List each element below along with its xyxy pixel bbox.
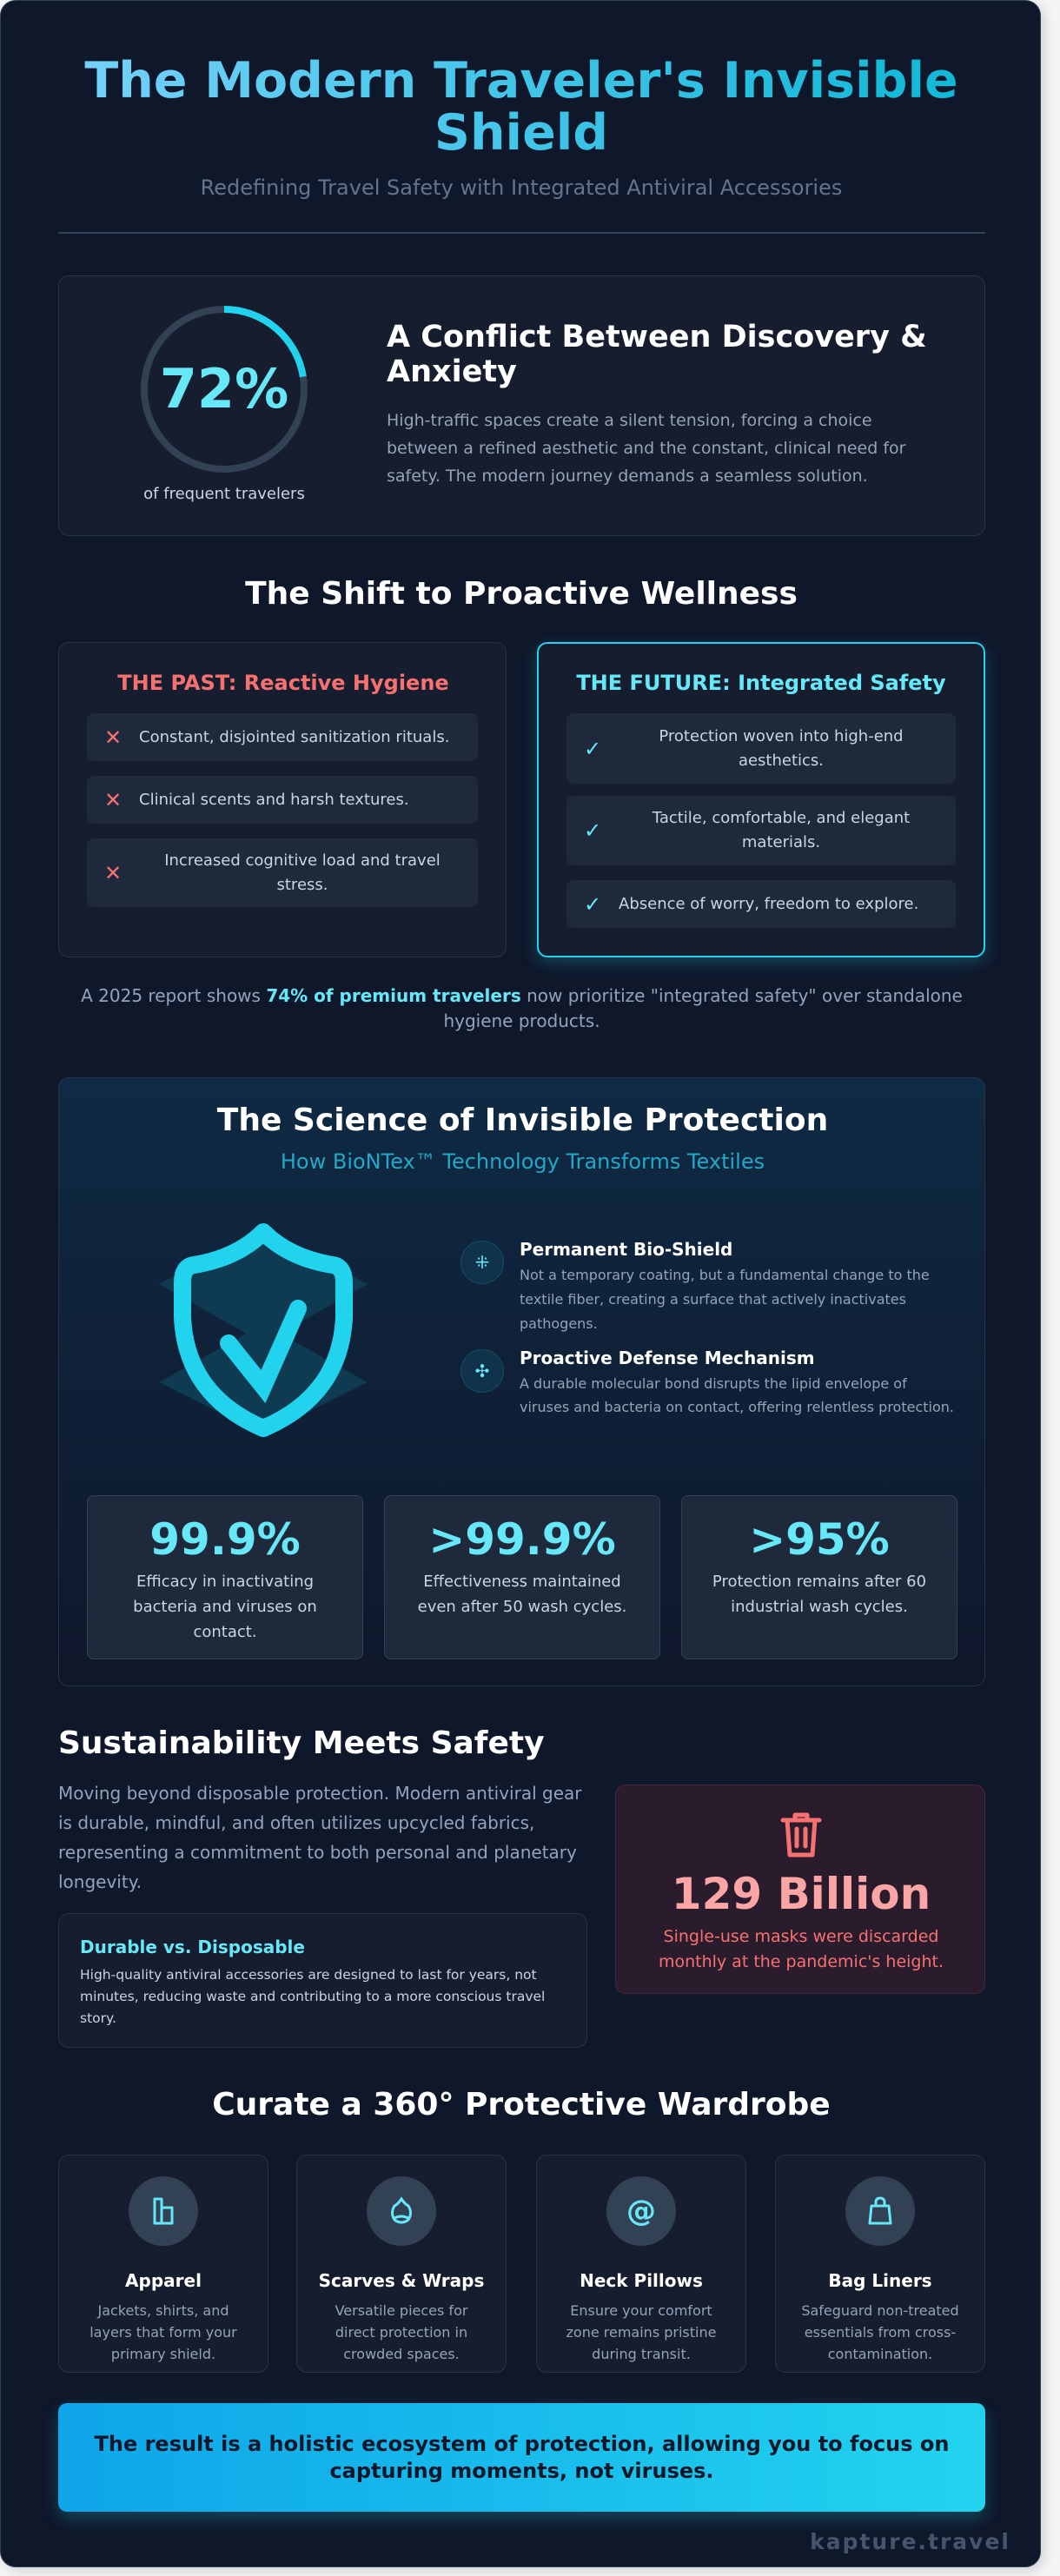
report note: A 2025 report shows 74% of premium travelers now prioritize "integrated safety" over standalone [81, 985, 963, 1006]
card: apparel: Jackets, shirts, and layers that form your primary shield. [89, 2302, 237, 2362]
feature: defense: Proactive Defense Mechanism [520, 1348, 815, 1368]
feature: bio-shield [460, 1239, 930, 1332]
future heading: THE FUTURE: Integrated Safety [576, 671, 946, 695]
conflict text: High-traffic spaces create a silent tension, forcing a choice [387, 411, 872, 430]
card: neck pillows: Ensure your comfort zone remains pristine during transit. [566, 2302, 716, 2362]
future item 2: Tactile, comfortable, and elegant materials. [653, 809, 910, 851]
banner: conclusion [58, 2403, 985, 2512]
panel: 129 billion: 129 Billion [672, 1869, 931, 1919]
card: scarves: Versatile pieces for direct protection in crowded spaces. [335, 2302, 467, 2362]
feature: defense: viruses and bacteria on contact, offering relentless protection. [520, 1399, 954, 1415]
heading: sustainability: Sustainability Meets Safety [58, 1725, 545, 1761]
future item 2: ✓ [584, 818, 601, 843]
donut chart 72%: 72% [160, 357, 288, 421]
panel: 129 billion [615, 1785, 985, 1994]
past item 2 [87, 776, 478, 824]
conflict heading: Anxiety [387, 354, 517, 389]
future item 3: Absence of worry, freedom to explore. [619, 895, 918, 912]
card: scarves: Scarves & Wraps [319, 2270, 484, 2291]
stat 99.9%: 99.9% [149, 1514, 301, 1565]
past item 1: Constant, disjointed sanitization rituals. [139, 728, 449, 745]
stat 99.9% [87, 1495, 363, 1659]
conflict text [387, 411, 905, 486]
card: neck pillows: @ [626, 2194, 656, 2228]
icon: puzzle: ✣ [475, 1361, 489, 1381]
card: bag liners: Safeguard non-treated essentials from cross-contamination. [801, 2302, 959, 2362]
stat 99.9%: Efficacy in inactivating bacteria and viruses on contact. [133, 1573, 317, 1641]
donut chart 72% [141, 306, 308, 473]
past item 1: ✕ [104, 725, 122, 749]
donut caption: of frequent travelers [143, 485, 305, 503]
stat >95% [681, 1495, 957, 1659]
title: The Modern Traveler's Invisible [84, 52, 958, 109]
panel: past [58, 642, 507, 957]
card: bag liners: Bag Liners [828, 2270, 932, 2291]
panel: future [537, 642, 985, 957]
past item 3 [87, 838, 478, 907]
title [1, 55, 1042, 159]
future item 1: Protection woven into high-end aesthetics. [659, 726, 904, 770]
icon: bio-shield [460, 1241, 504, 1284]
card: neck pillows [536, 2155, 746, 2373]
panel: durable vs disposable: High-quality antiviral accessories are designed to last for years, not minutes, reducing waste and contributing to a more conscious travel story. [80, 1967, 545, 2026]
subtitle: Redefining Travel Safety with Integrated Antiviral Accessories [201, 175, 842, 200]
science heading: The Science of Invisible Protection [217, 1103, 828, 1138]
panel: durable vs disposable: Durable vs. Disposable [80, 1937, 305, 1957]
banner: conclusion: capturing moments, not viruses. [329, 2459, 714, 2483]
past item 2: ✕ [104, 787, 122, 811]
icon: bio-shield: ⁜ [475, 1252, 489, 1273]
panel: science [58, 1077, 985, 1686]
conflict heading [387, 320, 927, 389]
report note [81, 985, 963, 1031]
future item 1 [566, 713, 956, 784]
future item 2 [566, 796, 956, 865]
conflict text: safety. The modern journey demands a seamless solution. [387, 467, 868, 486]
panel: conflict [58, 275, 985, 536]
stat >95%: >95% [749, 1514, 890, 1565]
past item 2: Clinical scents and harsh textures. [139, 791, 409, 808]
conflict text: between a refined aesthetic and the constant, clinical need for [387, 439, 905, 458]
card: apparel: Apparel [125, 2270, 202, 2291]
report note: hygiene products. [443, 1010, 600, 1031]
card: apparel [58, 2155, 268, 2373]
card: bag liners [775, 2155, 985, 2373]
past item 3: ✕ [104, 860, 122, 884]
icon: puzzle [460, 1349, 504, 1393]
card: neck pillows: Neck Pillows [580, 2270, 703, 2291]
stat >99.9% [384, 1495, 660, 1659]
sustainability text: Moving beyond disposable protection. Modern antiviral gear is durable, mindful, and often utilizes upcycled fabrics, representing a commitment to both personal and planetary longevity. [58, 1783, 581, 1892]
card: scarves [296, 2155, 507, 2373]
future item 1: ✓ [584, 737, 601, 761]
footer brand: kapture.travel [810, 2529, 1010, 2554]
future item 3: ✓ [584, 891, 601, 916]
panel: 129 billion: Single-use masks were discarded monthly at the pandemic's height. [659, 1927, 944, 1971]
panel: durable vs disposable [58, 1913, 587, 2048]
feature: defense: A durable molecular bond disrupts the lipid envelope of [520, 1375, 907, 1392]
stat >99.9%: >99.9% [428, 1514, 616, 1565]
heading: shift: The Shift to Proactive Wellness [245, 576, 798, 612]
feature: defense [460, 1348, 954, 1415]
past heading: THE PAST: Reactive Hygiene [117, 671, 449, 695]
heading: wardrobe: Curate a 360° Protective Wardrobe [212, 2087, 831, 2122]
banner: conclusion: The result is a holistic ecosystem of protection, allowing you to focus on [94, 2432, 949, 2456]
icon: shield [160, 1223, 367, 1437]
science subheading: How BioNTex™ Technology Transforms Textiles [281, 1149, 765, 1174]
icon: trash [780, 1812, 822, 1858]
past item 1 [87, 713, 478, 761]
feature: bio-shield: Not a temporary coating, but a fundamental change to the textile fiber, creating a surface that actively inactivates pathogens. [520, 1267, 930, 1332]
title: Shield [434, 104, 608, 162]
stat >99.9%: Effectiveness maintained even after 50 wash cycles. [418, 1573, 626, 1616]
stat >95%: Protection remains after 60 industrial wash cycles. [712, 1573, 926, 1616]
feature: bio-shield: Permanent Bio-Shield [520, 1239, 732, 1260]
future item 3 [566, 880, 956, 928]
past item 3: Increased cognitive load and travel stress. [164, 851, 441, 893]
conflict heading: A Conflict Between Discovery & [387, 320, 927, 354]
